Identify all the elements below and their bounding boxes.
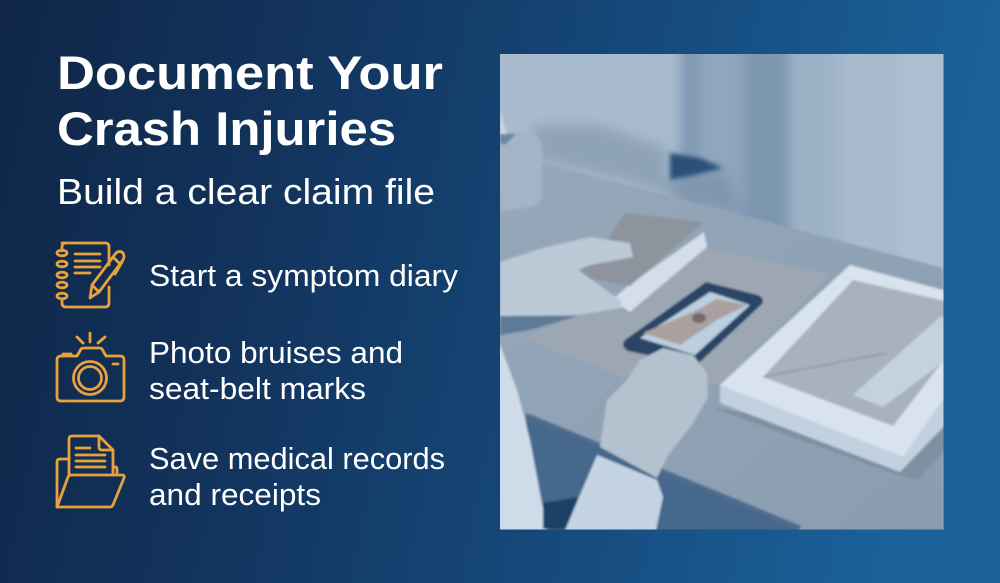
text: save medical records: and receipts (149, 478, 321, 512)
left arm sleeve (495, 345, 548, 535)
item: symptom diary (57, 243, 459, 307)
text: save medical records: Save medical records (149, 442, 445, 476)
text: start a symptom diary: Start a symptom diary (149, 259, 459, 293)
envelope (763, 280, 950, 426)
shoe shadow (670, 153, 723, 180)
envelope label (853, 317, 950, 407)
left hand (500, 237, 633, 316)
mat (523, 248, 830, 385)
pen cup (500, 132, 542, 212)
item: photos (57, 333, 403, 406)
title: Document Your (57, 46, 443, 99)
title (57, 46, 443, 155)
icon: folder with document (57, 436, 124, 507)
notebook (612, 232, 707, 312)
right sleeve (563, 455, 663, 535)
curtains (534, 54, 944, 229)
subtitle: Build a clear claim file (57, 171, 435, 212)
text: save medical records (149, 442, 445, 512)
shadow under left hand (500, 316, 578, 335)
photo: hands with phone on a desk (500, 54, 944, 530)
desk (495, 160, 943, 535)
title: Crash Injuries (57, 102, 396, 155)
item: records (57, 436, 445, 512)
right hand (600, 348, 708, 478)
text: photo bruises: Photo bruises and (149, 336, 403, 370)
folder under papers (710, 407, 950, 480)
text: photo bruises (149, 336, 403, 406)
phone (623, 282, 763, 365)
icon: notebook and pencil (57, 243, 124, 307)
icon: camera with flash (57, 333, 124, 401)
desk front (525, 413, 810, 535)
paper stack (720, 385, 950, 472)
chair (542, 496, 578, 530)
text: photo bruises: seat-belt marks (149, 372, 366, 406)
